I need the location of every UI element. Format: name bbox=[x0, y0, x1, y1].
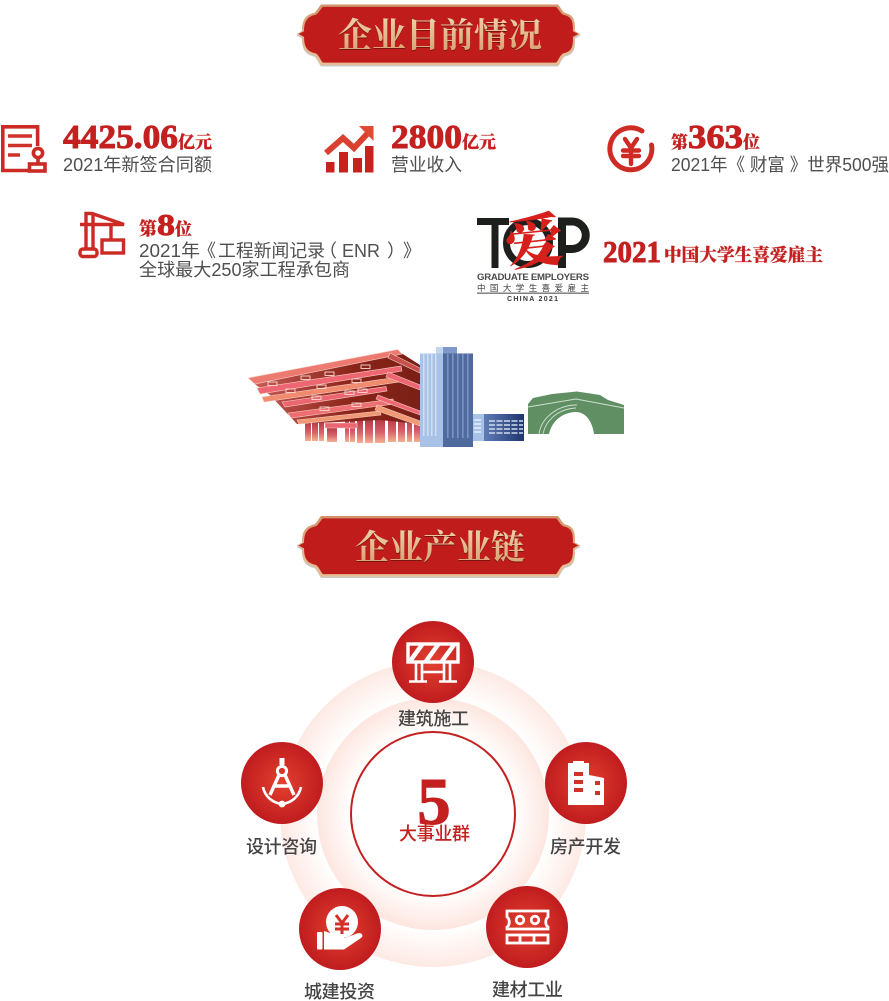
illustration: landmark buildings bbox=[248, 347, 624, 447]
node: 建筑施工 bbox=[392, 621, 474, 729]
China Pavilion bbox=[248, 350, 420, 443]
label: 2021年《 财富 》世界500强 bbox=[671, 155, 889, 175]
stat: 第8位: 8 bbox=[157, 207, 175, 242]
icon: contract bbox=[3, 127, 45, 171]
icon: rising chart bbox=[326, 126, 374, 172]
stat: 2800亿元: 亿元 bbox=[462, 132, 496, 152]
icon: road barrier bbox=[408, 642, 458, 682]
label: ENR bbox=[342, 241, 380, 261]
logo: TOP graduate employers: CHINA 2021 bbox=[507, 296, 558, 303]
label: 营业收入 bbox=[391, 155, 462, 175]
node: 建筑施工: 建筑施工 bbox=[398, 709, 469, 729]
node: 建材工业 bbox=[486, 886, 568, 1000]
columns bbox=[305, 415, 420, 443]
low building bbox=[473, 414, 524, 441]
red character 爱: 爱 bbox=[500, 207, 567, 278]
stat: 第363位: 位 bbox=[743, 132, 760, 152]
stat: 第363位 bbox=[610, 119, 889, 175]
heading: 企业目前情况: 企业目前情况 bbox=[338, 17, 542, 55]
label bbox=[139, 241, 421, 280]
node: 建材工业: 建材工业 bbox=[492, 980, 563, 1000]
stat: 第8位: 位 bbox=[175, 219, 192, 239]
outer ring bbox=[280, 661, 586, 967]
icon: crane bbox=[80, 214, 124, 256]
stat: 2021中国大学生喜爱雇主: 2021 bbox=[603, 234, 661, 269]
stone bridge bbox=[528, 392, 624, 434]
logo: TOP graduate employers bbox=[477, 207, 590, 303]
logo caption: GRADUATE EMPLOYERS bbox=[477, 272, 590, 283]
stat: 第363位: 363 bbox=[688, 119, 743, 156]
inner ring bbox=[317, 698, 549, 930]
label: （ bbox=[319, 241, 337, 261]
heading: 企业产业链: 企业产业链 bbox=[355, 529, 525, 567]
value: 第 bbox=[671, 132, 688, 152]
value: 4425.06 bbox=[63, 119, 178, 156]
label: 2021年新签合同额 bbox=[63, 155, 212, 175]
node: 房产开发 bbox=[545, 742, 627, 857]
stat: 2021中国大学生喜爱雇主 bbox=[603, 234, 823, 269]
center circle: 大事业群 bbox=[399, 824, 470, 844]
node: 城建投资 bbox=[299, 888, 381, 1001]
stat: 第8位 bbox=[80, 207, 421, 280]
label: 2021年 bbox=[139, 241, 200, 261]
icon: compass bbox=[263, 758, 301, 807]
stat: 2800亿元 bbox=[326, 119, 496, 175]
node: 房产开发: 房产开发 bbox=[550, 837, 621, 857]
letters TOP bbox=[477, 221, 586, 268]
label: 工程新闻记录 bbox=[218, 241, 325, 261]
logo: TOP graduate employers: 中国大学生喜爱雇主 bbox=[477, 283, 589, 293]
value: 2800 bbox=[391, 119, 462, 156]
banner: 企业产业链 bbox=[296, 516, 580, 578]
label: ） bbox=[387, 241, 405, 261]
icon: office buildings bbox=[568, 761, 604, 805]
node: 设计咨询 bbox=[241, 742, 323, 857]
center circle bbox=[351, 732, 515, 896]
label: 》 bbox=[403, 241, 421, 261]
label: 全球最大250家工程承包商 bbox=[139, 260, 350, 280]
node: 设计咨询: 设计咨询 bbox=[246, 837, 317, 857]
stat: 4425.06亿元: 亿元 bbox=[178, 132, 212, 152]
label: 《 bbox=[198, 241, 216, 261]
tower bbox=[420, 347, 473, 447]
banner: 企业目前情况 bbox=[296, 4, 580, 66]
icon: hand holding yen bbox=[317, 906, 362, 950]
icon: building material bbox=[507, 911, 548, 943]
diagram: 5 business groups bbox=[241, 621, 627, 1001]
stat: 4425.06亿元 bbox=[3, 119, 212, 175]
value: 第 bbox=[139, 219, 157, 239]
icon: yen coin bbox=[610, 128, 652, 170]
stat: 2021中国大学生喜爱雇主: 中国大学生喜爱雇主 bbox=[664, 245, 823, 265]
center circle: 5 bbox=[417, 765, 451, 839]
